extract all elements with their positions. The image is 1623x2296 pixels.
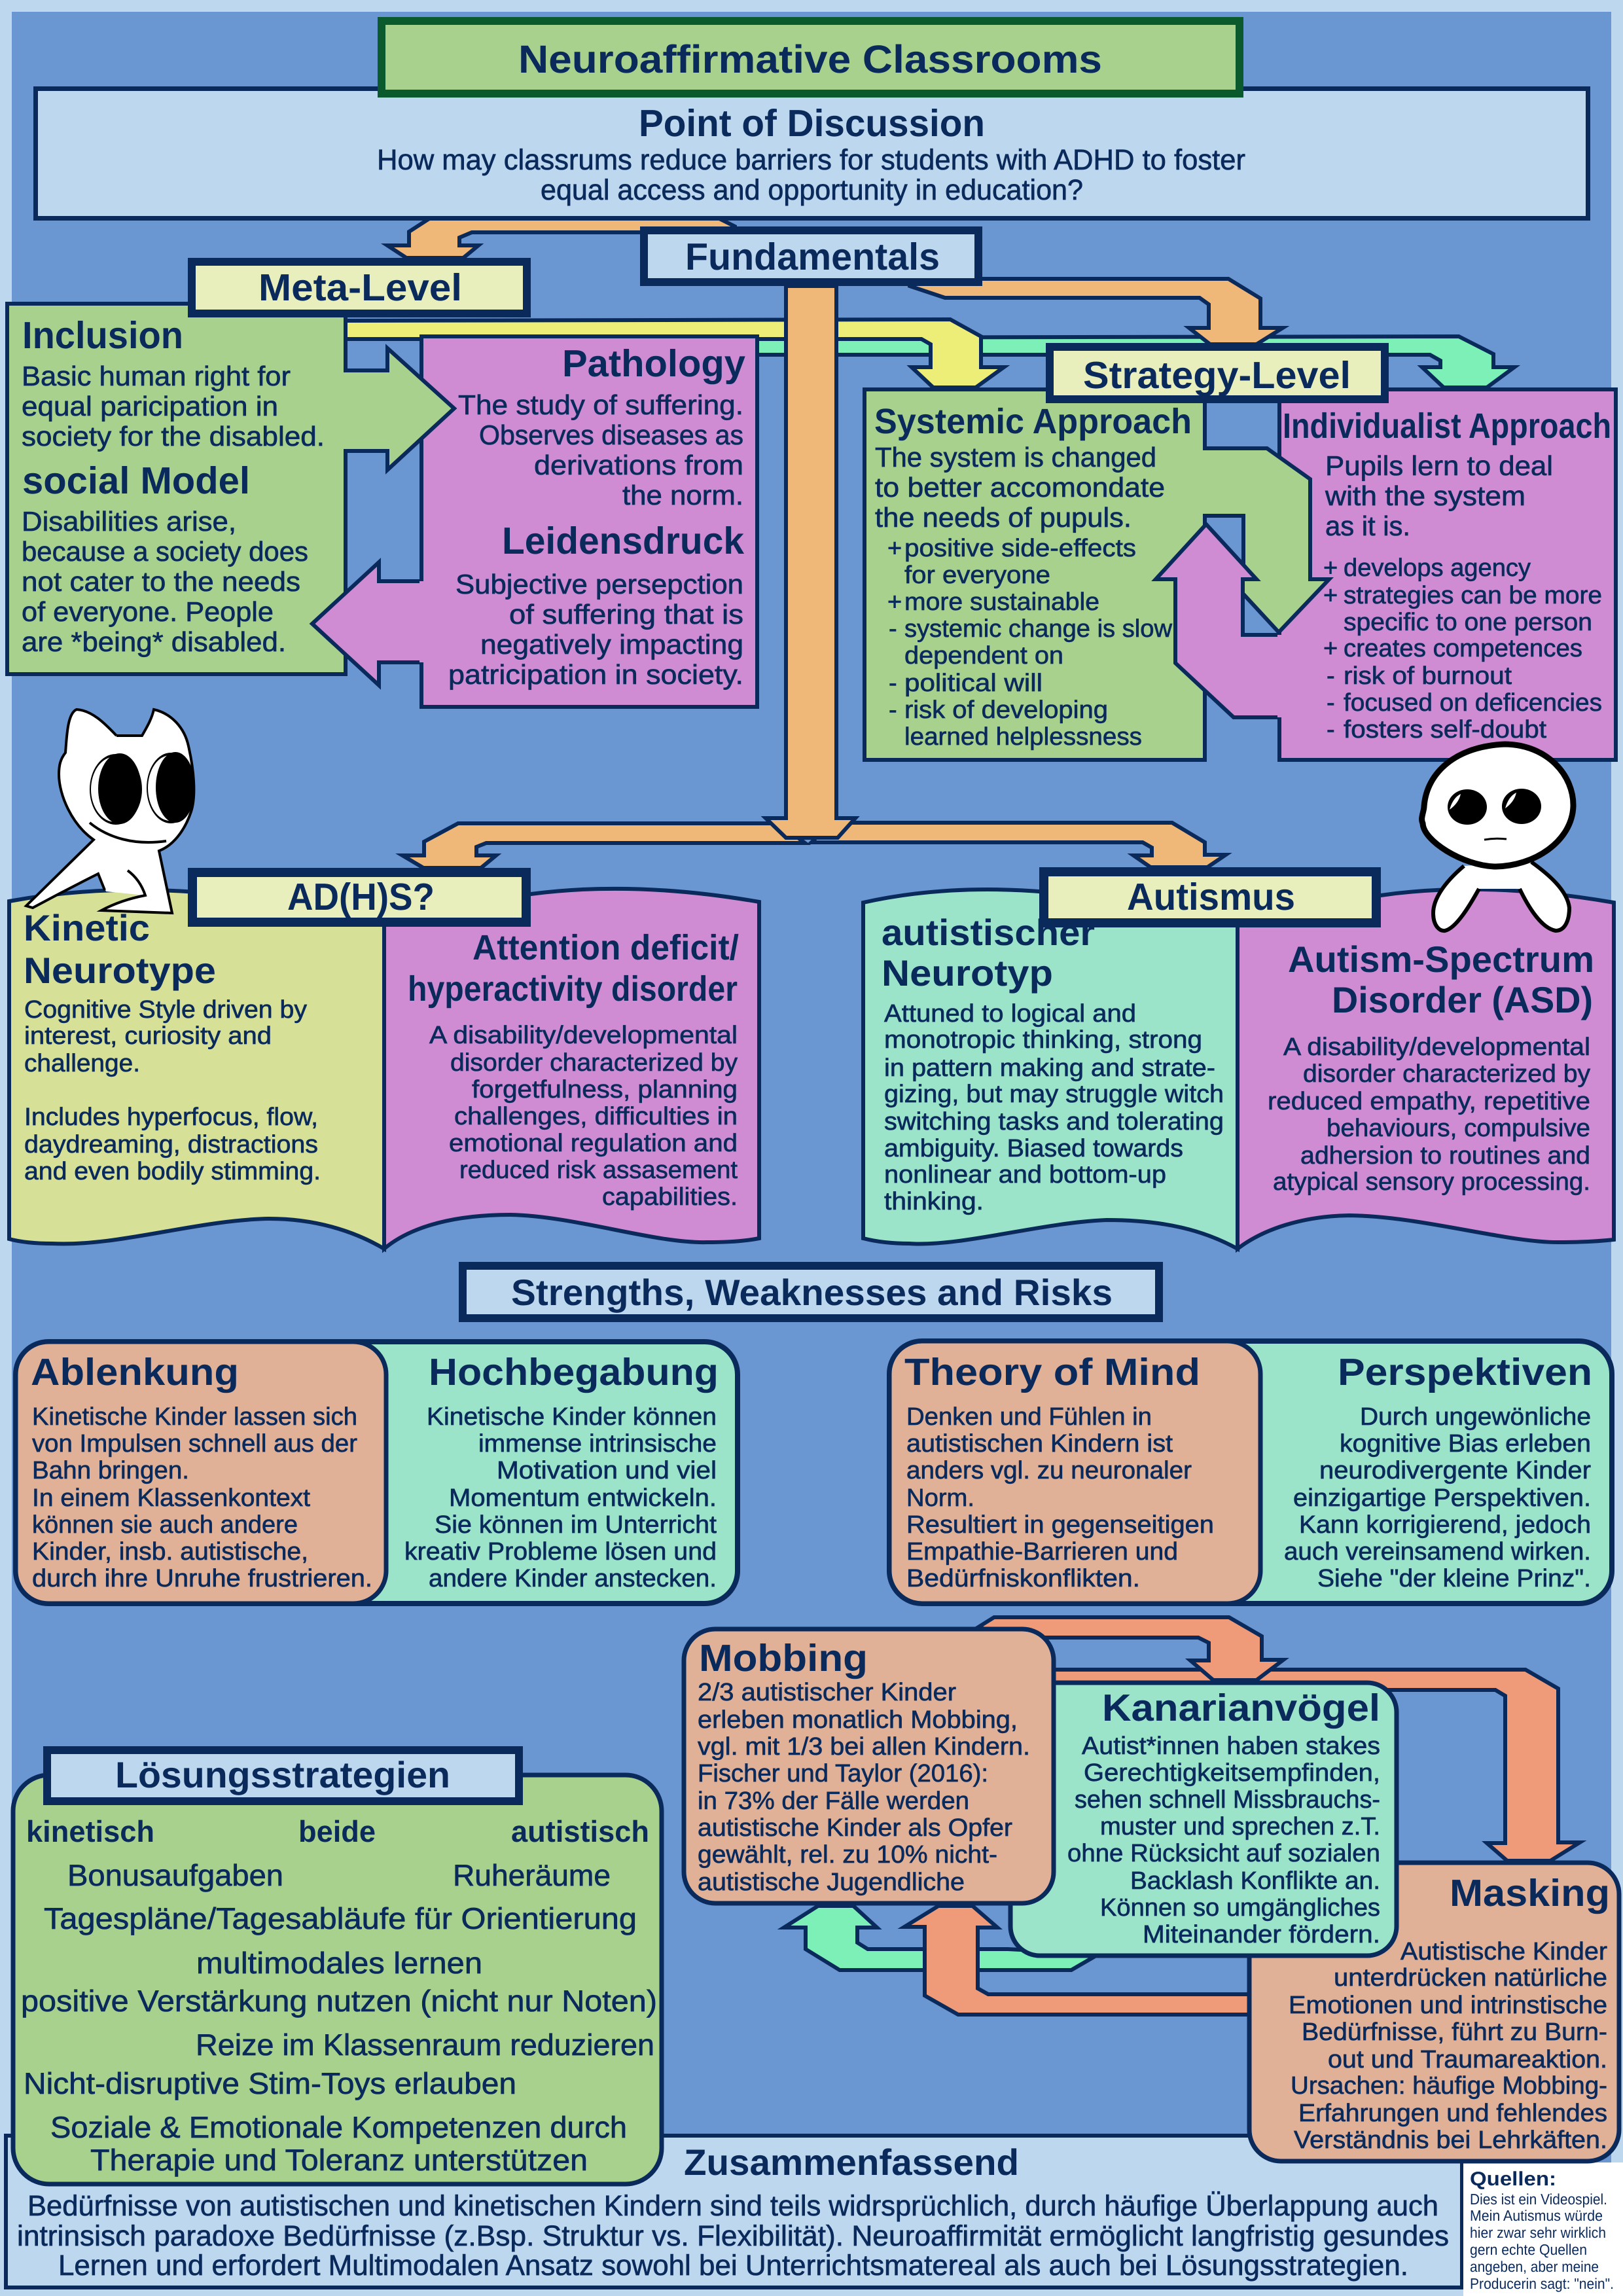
panel: Zusammenfassend: Lernen und erfordert Multimodalen Ansatz sowohl bei Unterrichtsmatereal als auch bei Lösungsstrategien. xyxy=(58,2250,1408,2282)
arrow: mint bar to individualist approach xyxy=(720,336,1514,387)
right page: attention deficit disorder: reduced risk assasement xyxy=(459,1157,738,1184)
left page: kinetic neurotype: Cognitive Style driven by xyxy=(24,996,307,1024)
panel: Mobbing: in 73% der Fälle werden xyxy=(698,1787,969,1815)
left page: autistic neurotype: thinking. xyxy=(884,1188,984,1215)
panel: pathology: Observes diseases as xyxy=(479,420,743,450)
heading: AD(H)S: AD(H)S? xyxy=(287,876,435,918)
card: Theory of Mind: Empathie-Barrieren und xyxy=(906,1538,1178,1566)
panel: Mobbing: erleben monatlich Mobbing, xyxy=(698,1706,1018,1734)
title: Neuroaffirmative Classrooms xyxy=(518,37,1102,81)
right page: autism spectrum disorder: Disorder (ASD) xyxy=(1332,979,1593,1020)
book panel: AD(H)S xyxy=(9,889,759,1249)
card: Ablenkung: von Impulsen schnell aus der xyxy=(32,1430,357,1458)
title xyxy=(382,21,1240,94)
right page: autism spectrum disorder: atypical sensory processing. xyxy=(1273,1168,1590,1196)
panel: Mobbing: autistische Jugendliche xyxy=(698,1869,965,1896)
right page: autism spectrum disorder: behaviours, compulsive xyxy=(1327,1115,1590,1142)
panel: inclusion and social model with arrow: are *being* disabled. xyxy=(22,626,286,657)
panel: Kanarienvögel: sehen schnell Missbrauchs- xyxy=(1075,1786,1380,1814)
text: individualist approach: with the system xyxy=(1325,480,1525,511)
column headings: autistisch xyxy=(511,1814,649,1848)
text: systemic approach: - xyxy=(889,615,897,643)
text: systemic approach: to better accomondate xyxy=(875,472,1165,503)
panel: Zusammenfassend xyxy=(6,2136,1462,2287)
text: systemic approach: positive side-effects xyxy=(904,535,1136,562)
panel: pathology: Pathology xyxy=(562,342,745,385)
card: Perspektiven: kognitive Bias erleben xyxy=(1340,1430,1591,1458)
character: autistic figure xyxy=(1422,744,1573,931)
book panel: Autismus xyxy=(863,889,1614,1249)
card: Ablenkung: In einem Klassenkontext xyxy=(32,1484,310,1512)
card: Theory of Mind: Norm. xyxy=(906,1484,974,1512)
card: Theory of Mind: Denken und Fühlen in xyxy=(906,1403,1152,1431)
right page: attention deficit disorder: A disability/developmental xyxy=(429,1022,738,1049)
panel: Masking: Ursachen: häufige Mobbing- xyxy=(1291,2072,1607,2100)
card: Ablenkung: können sie auch andere xyxy=(32,1511,298,1539)
panel: Kanarienvögel: Backlash Konflikte an. xyxy=(1130,1867,1380,1895)
right page: attention deficit disorder: Attention deficit/ xyxy=(473,928,739,967)
panel: Mobbing: vgl. mit 1/3 bei allen Kindern. xyxy=(698,1733,1030,1761)
heading: fundamentals: Fundamentals xyxy=(685,236,940,278)
panel: inclusion and social model with arrow xyxy=(7,304,454,674)
left page: autistic neurotype: switching tasks and tolerating xyxy=(884,1108,1224,1136)
text: individualist approach: - xyxy=(1327,689,1335,717)
text: individualist approach: + xyxy=(1323,635,1338,662)
panel: inclusion and social model with arrow: not cater to the needs xyxy=(22,566,300,597)
panel: Masking: Erfahrungen und fehlendes xyxy=(1298,2100,1607,2127)
panel: pathology: of suffering that is xyxy=(509,599,743,630)
panel: pathology: Subjective persepction xyxy=(455,569,743,600)
panel: Kanarienvögel: muster und sprechen z.T. xyxy=(1100,1813,1380,1840)
meta-level panels xyxy=(7,304,757,707)
card: Ablenkung xyxy=(16,1342,386,1604)
arrow: Masking to Mobbing xyxy=(904,1906,1257,2015)
panel: Quellen: angeben, aber meine xyxy=(1470,2258,1599,2275)
panel: Mobbing: gewählt, rel. zu 10% nicht- xyxy=(698,1841,997,1869)
card: Hochbegabung: immense intrinsische xyxy=(478,1430,717,1458)
left page: kinetic neurotype: daydreaming, distractions xyxy=(24,1131,318,1158)
text: systemic approach: - xyxy=(889,696,897,724)
card: Theory of Mind: Resultiert in gegenseitigen xyxy=(906,1511,1214,1539)
card: Perspektiven: Perspektiven xyxy=(1338,1351,1592,1393)
card: Ablenkung: Ablenkung xyxy=(31,1351,239,1393)
card: Ablenkung: Kinder, insb. autistische, xyxy=(32,1538,308,1566)
card: Perspektiven: Siehe "der kleine Prinz". xyxy=(1317,1565,1591,1592)
heading: strengths, weaknesses and risks: Strengths, Weaknesses and Risks xyxy=(511,1272,1113,1313)
text: individualist approach: fosters self-doubt xyxy=(1344,716,1546,744)
text: individualist approach: creates competences xyxy=(1344,635,1582,662)
panel: Masking: Masking xyxy=(1450,1872,1610,1914)
card: Theory of Mind xyxy=(889,1341,1260,1604)
heading: Autismus: Autismus xyxy=(1127,876,1295,918)
left page: autistic neurotype xyxy=(863,889,1238,1249)
text: systemic approach: dependent on xyxy=(904,642,1063,670)
arrow: Kanarienvögel to Masking xyxy=(1047,1670,1580,1861)
heading: meta-level xyxy=(192,262,527,314)
right page: attention deficit disorder xyxy=(384,889,759,1249)
card: Hochbegabung: kreativ Probleme lösen und xyxy=(404,1538,717,1566)
point of discussion panel xyxy=(35,89,1588,219)
text: individualist approach: Pupils lern to deal xyxy=(1325,450,1553,481)
text: systemic approach: learned helplessness xyxy=(904,723,1142,751)
strategies list: Nicht-disruptive Stim-Toys erlauben xyxy=(24,2066,516,2100)
panel: Kanarienvögel xyxy=(1010,1683,1397,1956)
left page: kinetic neurotype: Neurotype xyxy=(24,950,216,991)
panel: inclusion and social model with arrow: Basic human right for xyxy=(22,361,291,391)
strategies list: Bonusaufgaben xyxy=(67,1858,283,1892)
panel: kinetic strengths and weaknesses xyxy=(16,1342,738,1604)
panel: inclusion and social model with arrow: because a society does xyxy=(22,536,308,567)
arrow: fundamentals to meta-level xyxy=(387,219,735,258)
panel: Quellen xyxy=(1463,2162,1623,2296)
text: systemic approach: more sustainable xyxy=(904,588,1099,616)
card: Perspektiven: einzigartige Perspektiven. xyxy=(1293,1484,1591,1512)
text: systemic approach: risk of developing xyxy=(904,696,1108,724)
panel: pathology xyxy=(421,336,757,707)
arrow: branch to AD(H)S xyxy=(402,823,805,868)
left page: autistic neurotype: Attuned to logical and xyxy=(884,1000,1136,1028)
strategies list: Ruheräume xyxy=(453,1858,611,1892)
text: systemic approach: The system is changed xyxy=(875,442,1156,473)
right page: attention deficit disorder: emotional regulation and xyxy=(449,1130,738,1157)
panel: pathology: negatively impacting xyxy=(480,629,743,660)
column headings: beide xyxy=(298,1814,376,1848)
strategies list: multimodales lernen xyxy=(196,1946,482,1980)
panel: Masking: Autistische Kinder xyxy=(1400,1938,1607,1965)
card: Hochbegabung: andere Kinder anstecken. xyxy=(429,1565,717,1592)
panel: inclusion and social model with arrow: of everyone. People xyxy=(22,596,274,627)
card: Hochbegabung: Sie können im Unterricht xyxy=(435,1511,717,1539)
card: Hochbegabung: Hochbegabung xyxy=(429,1351,719,1393)
strategies list xyxy=(21,1858,657,2177)
text: individualist approach: + xyxy=(1323,554,1338,582)
card: Hochbegabung: Momentum entwickeln. xyxy=(449,1484,717,1512)
panel: Zusammenfassend: Bedürfnisse von autistischen und kinetischen Kindern sind teils widrsprüchlich, durch häufige Überlappung auch xyxy=(27,2190,1438,2222)
right page: autism spectrum disorder: adhersion to routines and xyxy=(1300,1142,1590,1170)
text: individualist approach: + xyxy=(1323,582,1338,609)
text: individualist approach: as it is. xyxy=(1325,511,1410,541)
text: systemic approach: the needs of pupuls. xyxy=(875,502,1132,533)
panel: Kanarienvögel: Autist*innen haben stakes xyxy=(1082,1732,1380,1760)
heading: strategy-level: Strategy-Level xyxy=(1083,354,1351,397)
panel: pathology: derivations from xyxy=(534,450,743,480)
strategy-level panels xyxy=(865,389,1616,760)
right page: attention deficit disorder: capabilities. xyxy=(602,1183,738,1211)
text: individualist approach: specific to one person xyxy=(1344,609,1592,636)
card: Theory of Mind: Theory of Mind xyxy=(904,1351,1200,1393)
panel: Quellen: gern echte Quellen xyxy=(1470,2241,1587,2258)
panel: Mobbing xyxy=(684,1629,1054,1903)
panel: Kanarienvögel: Gerechtigkeitsempfinden, xyxy=(1084,1759,1380,1787)
card: Theory of Mind: autistischen Kindern ist xyxy=(906,1430,1173,1458)
right page: autism spectrum disorder: Autism-Spectrum xyxy=(1288,939,1594,980)
panel: Quellen: Producerin sagt: "nein". xyxy=(1470,2275,1614,2292)
strategies list: Tagespläne/Tagesabläufe für Orientierung xyxy=(44,1901,637,1935)
panel: Kanarienvögel: Miteinander fördern. xyxy=(1143,1921,1380,1948)
card: Perspektiven xyxy=(1284,1351,1592,1592)
heading: strengths, weaknesses and risks xyxy=(463,1266,1159,1318)
panel: inclusion and social model with arrow: social Model xyxy=(22,459,250,502)
arrow: branch to Autismus xyxy=(812,823,1226,867)
right page: attention deficit disorder: challenges, difficulties in xyxy=(454,1103,738,1130)
left page: kinetic neurotype: interest, curiosity and xyxy=(24,1022,272,1050)
panel: inclusion and social model with arrow: Inclusion xyxy=(22,314,183,357)
right page: attention deficit disorder: forgetfulness, planning xyxy=(472,1076,738,1103)
text: individualist approach: develops agency xyxy=(1344,554,1531,582)
figure eyes xyxy=(1448,789,1541,825)
panel: Masking: unterdrücken natürliche xyxy=(1334,1964,1607,1992)
heading: Lösungsstrategien xyxy=(47,1750,519,1801)
card: Theory of Mind: anders vgl. zu neuronaler xyxy=(906,1457,1192,1484)
panel: Zusammenfassend: intrinsisch paradoxe Bedürfnisse (z.Bsp. Struktur vs. Flexibilität). Neuroaffirmität ermöglicht langfristig gesundes xyxy=(17,2220,1449,2252)
text: systemic approach: systemic change is slow xyxy=(904,615,1173,643)
panel: Zusammenfassend: Zusammenfassend xyxy=(684,2142,1019,2183)
heading: Lösungsstrategien: Lösungsstrategien xyxy=(115,1754,450,1795)
panel: pathology: patricipation in society. xyxy=(448,659,743,690)
left page: autistic neurotype: monotropic thinking, strong xyxy=(884,1026,1202,1054)
heading: meta-level: Meta-Level xyxy=(259,266,462,309)
right page: autism spectrum disorder: A disability/developmental xyxy=(1283,1033,1590,1061)
card: Ablenkung: durch ihre Unruhe frustrieren. xyxy=(32,1565,372,1592)
card: Ablenkung: Bahn bringen. xyxy=(32,1457,189,1484)
panel: Quellen: Dies ist ein Videospiel. xyxy=(1470,2191,1607,2208)
column headings: kinetisch xyxy=(26,1814,154,1848)
left page: autistic neurotype: Neurotyp xyxy=(882,952,1053,994)
panel: Quellen: Quellen: xyxy=(1470,2168,1556,2190)
strategies list: Reize im Klassenraum reduzieren xyxy=(196,2028,654,2062)
card: Theory of Mind: Bedürfniskonflikten. xyxy=(906,1565,1140,1592)
right page: attention deficit disorder: hyperactivity disorder xyxy=(408,969,738,1009)
cat eyes xyxy=(90,752,195,825)
character: kinetic cat xyxy=(26,709,195,913)
left page: kinetic neurotype xyxy=(9,890,384,1249)
strategies list: Therapie und Toleranz unterstützen xyxy=(90,2143,588,2177)
column headings xyxy=(26,1814,649,1848)
left page: autistic neurotype: gizing, but may struggle witch xyxy=(884,1081,1224,1108)
panel shape: systemic approach with arrow xyxy=(865,389,1329,760)
discussion question: equal access and opportunity in education? xyxy=(541,174,1083,206)
panel: Quellen: Mein Autismus würde xyxy=(1470,2207,1603,2224)
panel shape: individualist approach xyxy=(1279,389,1616,760)
arrow: individualist approach to systemic approach xyxy=(1156,524,1283,717)
text: individualist approach: - xyxy=(1327,662,1335,690)
panel: Masking xyxy=(1249,1863,1619,2161)
panel: Mobbing: Mobbing xyxy=(699,1637,868,1679)
right page: autism spectrum disorder xyxy=(1238,889,1614,1249)
text: systemic approach: for everyone xyxy=(904,562,1050,589)
card: Perspektiven: Kann korrigierend, jedoch xyxy=(1299,1511,1591,1539)
text: individualist approach: risk of burnout xyxy=(1344,662,1512,690)
text: systemic approach: Systemic Approach xyxy=(874,402,1192,441)
left page: kinetic neurotype: Kinetic xyxy=(24,907,150,948)
figure mouth xyxy=(1484,838,1507,840)
strategies list: Soziale & Emotionale Kompetenzen durch xyxy=(50,2110,627,2144)
arrow: Mobbing to Kanarienvögel xyxy=(978,1617,1283,1680)
panel: Lösungsstrategien xyxy=(13,1750,662,2184)
arrow: central stem from fundamentals xyxy=(766,286,855,838)
card: Perspektiven: Durch ungewönliche xyxy=(1360,1403,1591,1431)
panel: Mobbing: Fischer und Taylor (2016): xyxy=(698,1760,988,1787)
text: systemic approach: - xyxy=(889,670,897,697)
arrow: yellow bar to systemic approach xyxy=(344,319,1004,387)
text: individualist approach xyxy=(1283,406,1611,744)
right page: autism spectrum disorder: reduced empathy, repetitive xyxy=(1268,1088,1590,1115)
strategies list: positive Verstärkung nutzen (nicht nur Noten) xyxy=(21,1984,657,2018)
panel: Kanarienvögel: Können so umgängliches xyxy=(1100,1894,1380,1922)
left page: autistic neurotype: ambiguity. Biased towards xyxy=(884,1135,1183,1162)
text: systemic approach: + xyxy=(887,588,902,616)
panel: pathology: The study of suffering. xyxy=(458,389,743,420)
panel: Masking: Verständnis bei Lehrkäften. xyxy=(1294,2126,1607,2154)
panel: inclusion and social model with arrow: Disabilities arise, xyxy=(22,506,236,537)
left page: autistic neurotype: nonlinear and bottom-up xyxy=(884,1161,1166,1189)
arrow: fundamentals to strategy-level xyxy=(910,279,1283,344)
heading: Autismus xyxy=(1044,872,1376,923)
card: Hochbegabung xyxy=(404,1351,719,1592)
heading: strategy-level xyxy=(1050,347,1385,399)
panel: pathology: the norm. xyxy=(622,480,743,511)
text: individualist approach: focused on deficencies xyxy=(1344,689,1602,717)
panel: inclusion and social model with arrow: equal paricipation in xyxy=(22,391,278,422)
card: Ablenkung: Kinetische Kinder lassen sich xyxy=(32,1403,357,1431)
discussion question: How may classrums reduce barriers for students with ADHD to foster xyxy=(377,144,1245,176)
panel: Kanarienvögel: ohne Rücksicht auf sozialen xyxy=(1067,1840,1380,1867)
panel: Mobbing: 2/3 autistischer Kinder xyxy=(698,1679,956,1706)
panel: inclusion and social model with arrow: society for the disabled. xyxy=(22,421,325,452)
card: Perspektiven: auch vereinsamend wirken. xyxy=(1284,1538,1591,1566)
card: Hochbegabung: Motivation und viel xyxy=(497,1457,717,1484)
text: individualist approach: - xyxy=(1327,716,1335,744)
card: Perspektiven: neurodivergente Kinder xyxy=(1319,1457,1591,1484)
panel: Masking: Emotionen und intrinstische xyxy=(1289,1992,1607,2019)
text: systemic approach: political will xyxy=(904,670,1043,697)
text: individualist approach: strategies can be more xyxy=(1344,582,1602,609)
heading: fundamentals xyxy=(644,230,978,282)
discussion question xyxy=(377,144,1245,206)
left page: autistic neurotype: in pattern making and strate- xyxy=(884,1054,1215,1082)
right page: attention deficit disorder: disorder characterized by xyxy=(450,1049,738,1077)
heading: AD(H)S xyxy=(192,872,526,922)
arrow: pathology to inclusion xyxy=(312,562,424,685)
panel: Masking: Bedürfnisse, führt zu Burn- xyxy=(1302,2018,1607,2046)
right page: autism spectrum disorder: disorder characterized by xyxy=(1303,1060,1590,1088)
left page: kinetic neurotype: Includes hyperfocus, flow, xyxy=(24,1103,318,1131)
left page: kinetic neurotype: and even bodily stimming. xyxy=(24,1158,321,1185)
panel: pathology: Leidensdruck xyxy=(502,520,745,562)
text: systemic approach: + xyxy=(887,535,902,562)
panel: autistic strengths and weaknesses xyxy=(889,1341,1612,1604)
card: Hochbegabung: Kinetische Kinder können xyxy=(427,1403,717,1431)
text: systemic approach xyxy=(874,402,1192,751)
left page: autistic neurotype: autistischer xyxy=(882,912,1095,953)
left page: kinetic neurotype: challenge. xyxy=(24,1050,140,1077)
arrow: Kanarienvögel to Mobbing (mint) xyxy=(784,1906,1099,1970)
panel: Kanarienvögel: Kanarianvögel xyxy=(1102,1687,1380,1729)
panel: Mobbing: autistische Kinder als Opfer xyxy=(698,1814,1012,1842)
panel: Masking: out und Traumareaktion. xyxy=(1328,2046,1607,2073)
panel: Quellen: hier zwar sehr wirklich xyxy=(1470,2224,1606,2241)
heading: point of discussion: Point of Discussion xyxy=(639,102,985,145)
